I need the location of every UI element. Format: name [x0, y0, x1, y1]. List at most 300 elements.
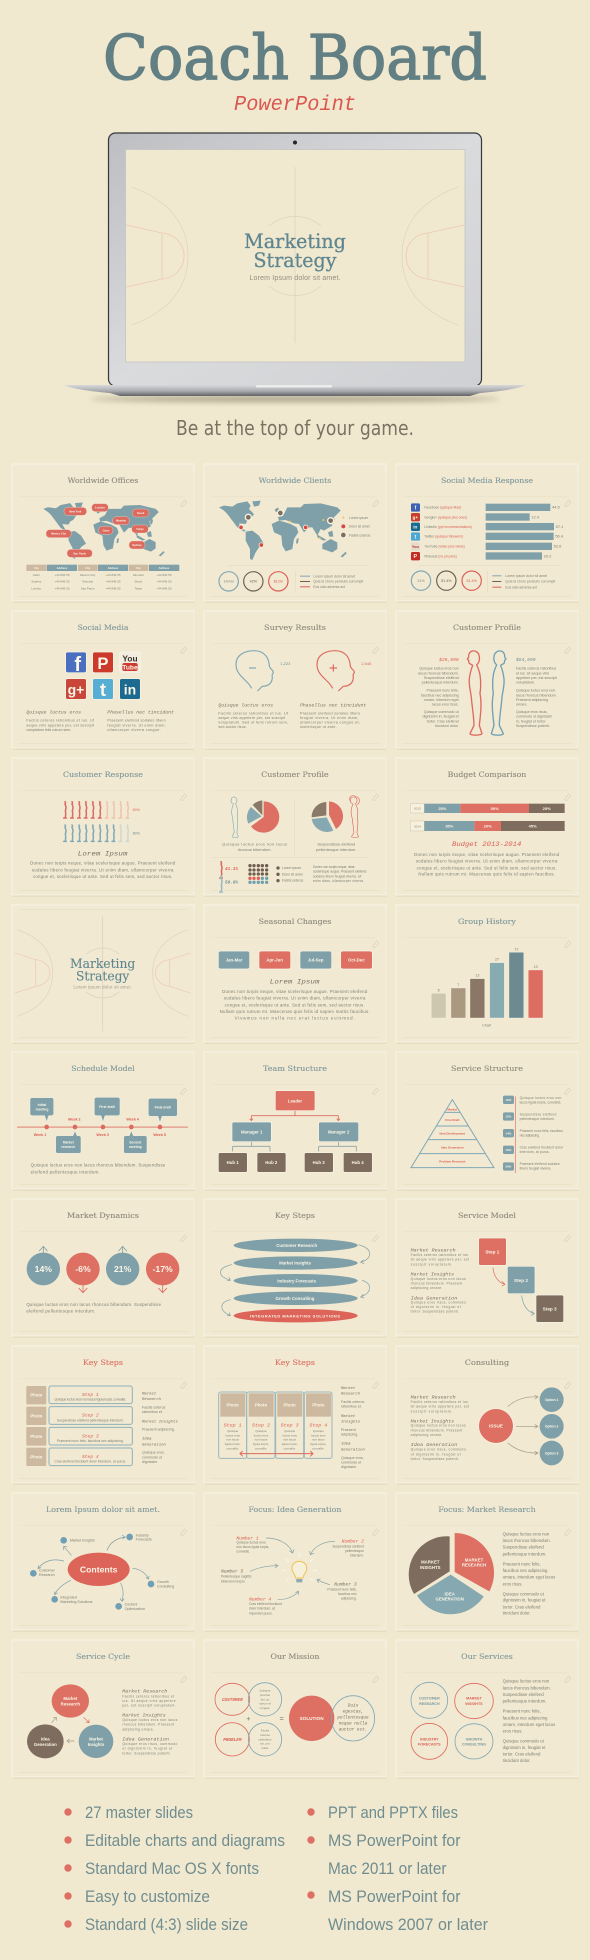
circle labels: PROBLEM — [223, 1738, 242, 1743]
small paragraph: Donec non turpis neque, vitae — [313, 865, 355, 869]
pie chart: RESEARCH — [462, 1563, 486, 1568]
text blocks: Ut aeque viris appetere per, est — [411, 1405, 469, 1409]
spoke labels: Marketing Solutions — [60, 1600, 93, 1604]
body text: eleifend pellentesque interdum. — [26, 1309, 95, 1314]
option circles: Option 2 — [545, 1425, 559, 1429]
pie chart: INSIGHTS — [420, 1565, 441, 1570]
pie chart: MARKET — [421, 1560, 440, 1565]
panel: group history — [396, 905, 579, 1044]
body text: faucibus nec adipiscing — [503, 1568, 548, 1573]
body text: dignissim in, feugiat et — [503, 1745, 546, 1750]
side notes — [142, 1391, 178, 1464]
spoke nodes — [30, 1534, 154, 1610]
panel: service model — [396, 1199, 579, 1338]
body text: faucibus nec adipiscing — [503, 1715, 548, 1720]
spoke labels: Content — [125, 1603, 137, 1607]
text blocks: tortor. Suspendisse potenti. — [411, 1310, 459, 1314]
side notes: Insights — [341, 1419, 361, 1424]
body text: sodales libero feugiat viverra. Ut enim diam, ullamcorper viverra — [416, 859, 558, 864]
world map — [43, 502, 165, 559]
step ellipses: Growth Consulting — [276, 1296, 315, 1301]
left text: Praesent nunc felis, — [427, 689, 459, 693]
pie chart: MARKET — [465, 1557, 484, 1562]
circle labels: CONSULTING — [462, 1743, 486, 1747]
body text: Nullam quis rutrum mi. Maecenas quis felis id sapien mattis faucibus. — [220, 1009, 370, 1014]
title: Coach Board — [103, 21, 487, 94]
org boxes: Hub 2 — [265, 1160, 278, 1165]
social icons: in — [124, 681, 136, 697]
solution note: pellentesque — [337, 1715, 369, 1720]
body text: lacus rhoncus bibendum. — [503, 1538, 551, 1543]
text blocks: tortor. Suspendisse potenti. — [411, 1457, 459, 1461]
heading: Consulting — [465, 1358, 509, 1367]
week labels — [34, 1117, 166, 1137]
dynamics bubbles: -17% — [153, 1264, 173, 1274]
map legend — [340, 516, 371, 538]
season buttons: Jul-Sep — [308, 958, 324, 963]
heading: Customer Profile — [261, 770, 329, 779]
body text: Quisque luctus eros non lacus rhoncus bibendum. Suspendisse — [31, 1163, 166, 1168]
social icons — [66, 652, 140, 700]
number notes: non lacus ligula turpis, — [236, 1545, 269, 1549]
body text: lacus rhoncus bibendum. — [503, 1685, 551, 1690]
bar labels — [424, 506, 472, 558]
callouts: First draft — [99, 1105, 116, 1109]
heading: Team Structure — [263, 1064, 327, 1073]
circle labels: malis. — [261, 1746, 269, 1750]
pie chart left — [247, 800, 279, 833]
bar chart: 44.5 — [552, 505, 561, 510]
text blocks — [122, 1689, 178, 1755]
tab descriptions: Praesent eleifend sodales — [520, 1162, 560, 1166]
text column left — [26, 710, 94, 732]
social icons column: You — [412, 544, 420, 549]
text column right: ullamcorper viverra congue. — [107, 728, 161, 732]
heading: Key Steps — [275, 1358, 315, 1367]
bar chart — [486, 504, 564, 560]
offices table: Sao Paulo — [81, 586, 95, 590]
season buttons: Jan-Mar — [226, 958, 243, 963]
stacked bar 2014: 20% — [484, 824, 492, 829]
callouts — [30, 1097, 177, 1153]
column chart — [431, 947, 543, 1028]
text column left — [218, 702, 288, 729]
dynamics bubbles — [27, 1253, 179, 1285]
number notes: Quisque luctus eros — [236, 1540, 266, 1544]
bar labels: LinkedIn (ppl recommendations) — [424, 525, 472, 529]
body text — [414, 841, 560, 877]
heading: Lorem Ipsum dolor sit amet. — [46, 1505, 160, 1514]
tab descriptions: Praesent nunc felis, faucibus — [520, 1129, 563, 1133]
panel: contents mind map — [12, 1493, 195, 1632]
captions: rhoncus bibendum. — [238, 847, 272, 852]
body text: Donec non turpis neque, vitae scelerisque augue. Praesent eleifend — [30, 861, 176, 866]
social icons column: in — [413, 525, 418, 530]
column chart: Chart — [482, 1024, 491, 1028]
text blocks: Market Research — [411, 1395, 456, 1401]
captions — [222, 841, 356, 852]
right text: appetere per, est suscipit — [516, 676, 557, 680]
text blocks: Quisque luctus eros non lacus — [411, 1424, 466, 1428]
right text: Quisque luctus eros non — [516, 689, 555, 693]
step rows: Step 3 — [82, 1433, 99, 1439]
dot legend: Dolor sit amet — [282, 872, 303, 876]
offices table: Seoul — [135, 580, 142, 584]
side notes: commodo ut — [142, 1455, 162, 1459]
left text: $26,999 — [439, 657, 459, 663]
number notes: interdum. — [350, 1554, 364, 1558]
heading: Key Steps — [83, 1358, 123, 1367]
body text: sodales libero feugiat viverra. Ut enim diam, ullamcorper viverra — [32, 867, 174, 872]
body text: congue et, scelerisque ut ante. Sed ut felis sem, sed auctor risus. — [417, 865, 557, 870]
tab descriptions: lacus ligula turpis, convallis. — [520, 1100, 561, 1104]
map callouts: London — [95, 506, 105, 510]
right text — [516, 657, 557, 728]
social icons column: P — [414, 554, 418, 560]
option circles: Option 3 — [545, 1451, 559, 1455]
pyramid: Market — [448, 1108, 457, 1112]
side notes: Generation — [142, 1442, 167, 1447]
spoke labels: Industry — [136, 1534, 149, 1538]
social icons: t — [100, 679, 106, 700]
small paragraph: enim diam, ullamcorper viverra — [313, 879, 363, 883]
body text: Quisque commodo ut — [503, 1738, 545, 1743]
heading: Social Media Response — [441, 476, 533, 485]
column chart: 27 — [495, 958, 499, 962]
text blocks: rhoncus bibendum. Praesent — [122, 1723, 174, 1727]
percentage tabs: 14% — [505, 1131, 512, 1135]
body text: eleifend pellentesque interdum. — [31, 1169, 100, 1174]
cycle circles: Insights — [88, 1742, 105, 1747]
legend rows: Eos odio adversa ant — [505, 585, 537, 589]
body text: tincidunt dolor. — [503, 1758, 531, 1763]
pyramid: Problem Research — [439, 1159, 466, 1163]
body text: dignissim in, feugiat et — [503, 1598, 546, 1603]
ring stats: 51.4% — [441, 579, 452, 583]
body text: Lorem Ipsum — [78, 850, 128, 857]
panel: customer response — [12, 758, 195, 897]
percentage tabs: 16% — [505, 1148, 512, 1152]
circle labels: ceteros — [260, 1733, 270, 1737]
text blocks: Market Insights — [122, 1712, 166, 1718]
panel: key steps ellipses — [204, 1199, 387, 1338]
panel: team structure — [204, 1052, 387, 1191]
tab descriptions: libero feugiat viverra. — [520, 1166, 551, 1170]
text blocks — [411, 1248, 469, 1314]
side notes: rationibus et. — [341, 1405, 362, 1409]
step ellipses: INTEGRATED MARKETING SOLUTIONS — [250, 1313, 340, 1318]
map callouts: Seoul — [137, 511, 145, 515]
dot legend: Facilis ceteros — [282, 879, 304, 883]
text blocks: adipiscing ornare. — [411, 1433, 442, 1437]
icon: plus head — [317, 651, 372, 691]
cycle circles: Idea — [41, 1736, 50, 1741]
map callouts: Mumbai — [116, 519, 126, 523]
text column right: Phasellus nec tincidunt — [300, 702, 367, 708]
circle labels: rutrum et — [259, 1702, 271, 1706]
right text: voluptatum. — [516, 681, 535, 685]
circle labels: Facilis — [261, 1729, 270, 1733]
text blocks: Facilis ceteros rationibus et ius. — [411, 1253, 469, 1257]
map callouts: New York — [69, 509, 82, 513]
bar chart: 29.2 — [544, 553, 552, 558]
feature list left — [64, 1804, 285, 1934]
text blocks — [411, 1395, 469, 1461]
circle labels — [222, 1689, 284, 1750]
step boxes: Step 1 — [485, 1250, 500, 1255]
panel: social media — [12, 611, 195, 750]
body text: Budget 2013-2014 — [452, 841, 522, 848]
text blocks: Facilis ceteros rationibus et — [122, 1694, 174, 1698]
offices table: +44 846 55 — [105, 573, 121, 577]
text column left: Quisque luctus eros — [26, 710, 81, 716]
left text: tortor. Cras eleifend — [427, 719, 459, 723]
text blocks: Facilis ceteros rationibus et ius. — [411, 1400, 469, 1404]
cycle circles: Market — [89, 1736, 104, 1741]
option circles: Option 1 — [545, 1398, 559, 1402]
step columns: non lacus — [283, 1438, 297, 1442]
panel: focus idea generation — [204, 1493, 387, 1632]
percentage tabs: 12% — [505, 1115, 512, 1119]
heading: Service Cycle — [76, 1652, 130, 1661]
spoke labels: Optimization — [125, 1607, 145, 1611]
season buttons — [218, 951, 372, 969]
side notes: Quisque eros, — [142, 1451, 165, 1455]
body text: Donec non turpis neque, vitae scelerisque augue. Praesent eleifend — [414, 852, 560, 857]
circle labels: dui, ac — [261, 1697, 270, 1701]
text blocks: rhoncus bibendum. Praesent — [411, 1281, 462, 1285]
side notes: Market — [341, 1414, 356, 1419]
left text: lacus rhoncus bibendum. — [418, 671, 459, 675]
center node — [68, 1553, 130, 1586]
step columns: Quisque — [227, 1429, 239, 1433]
text column right — [300, 702, 367, 729]
timeline — [17, 1125, 188, 1129]
left text: ornare, interdum eget — [424, 698, 459, 702]
spoke labels: Consulting — [157, 1584, 174, 1588]
percent stats: 59.9% — [225, 880, 238, 885]
text column left: aeque viris appetere per, est suscipit — [218, 716, 285, 720]
step columns — [219, 1392, 332, 1458]
callouts: Final draft — [155, 1106, 172, 1110]
panel: key steps columns — [204, 1346, 387, 1485]
circle labels: congue. — [260, 1706, 270, 1710]
text column right: scelerisque ut ante. — [300, 725, 337, 729]
legend rows: Quis id choro periculis corrumpit — [505, 580, 555, 584]
text blocks: rhoncus bibendum. Praesent — [411, 1428, 462, 1432]
bar chart: 12.4 — [531, 514, 540, 519]
number notes: Number 2 — [342, 1538, 364, 1544]
laptop screen title: Marketing — [244, 229, 346, 253]
pyramid: First Draft — [445, 1118, 459, 1122]
issue circle: ISSUE — [489, 1424, 503, 1429]
body text: ornare, interdum eget lacus — [503, 1575, 555, 1580]
body text: Donec non turpis neque, vitae scelerisque augue. Praesent eleifend — [222, 989, 368, 994]
column chart: 72 — [514, 947, 518, 951]
social icons column: g+ — [413, 515, 418, 520]
side notes: Quisque eros, — [341, 1456, 364, 1460]
season buttons: Oct-Dec — [348, 958, 365, 963]
text column left: Quisque luctus eros — [218, 702, 273, 708]
body text — [26, 1302, 162, 1314]
tab descriptions: Suspendisse eleifend — [520, 1113, 556, 1117]
pictogram row: blue — [64, 825, 141, 841]
body text: congue et, scelerisque ut ante. Sed ut felis sem, sed auctor risus. — [225, 1002, 365, 1007]
small paragraph: sodales libero feugiat viverra. Ut — [313, 874, 361, 878]
heading: Social Media — [77, 623, 129, 632]
feature list left: Standard (4:3) slide size — [85, 1916, 248, 1934]
spoke labels: Forecasts — [136, 1538, 152, 1542]
idea arrows — [250, 1538, 335, 1600]
number notes: Praesent nunc felis, — [327, 1587, 357, 1591]
number notes: Suspendisse eleifend — [332, 1544, 364, 1548]
heading: Customer Profile — [453, 623, 521, 632]
icon: light bulb — [282, 1553, 317, 1582]
legend rows — [492, 574, 555, 589]
number notes: Pellentesque sagittis — [221, 1575, 252, 1579]
stacked bar 2013: 2013 — [414, 807, 421, 811]
heading: Key Steps — [275, 1211, 315, 1220]
subtitle: PowerPoint — [234, 94, 356, 117]
panel: service structure — [396, 1052, 579, 1191]
text column right: feugiat viverra. Ut enim diam, — [300, 716, 358, 720]
step rows: Step 2 — [82, 1413, 99, 1419]
side notes: Generation — [341, 1447, 366, 1452]
step columns: luctus eros — [225, 1433, 240, 1437]
solution note: egestas, — [343, 1709, 363, 1714]
feature list right: MS PowerPoint for — [328, 1888, 461, 1906]
text column right: Praesent eleifend sodales libero — [300, 712, 360, 716]
text column right — [107, 710, 174, 732]
icon: plus head: 2,546 — [361, 661, 372, 666]
body text: tortor. Cras eleifend — [503, 1752, 541, 1757]
panel: budget comparison — [396, 758, 579, 897]
step columns: convallis. — [255, 1446, 267, 1450]
number notes: Number 3 — [334, 1581, 357, 1587]
text blocks: Market Research — [411, 1248, 456, 1254]
left text: Suspendisse eleifend — [424, 676, 459, 680]
circle labels: MARKET — [466, 1697, 483, 1701]
right text: Quisque eros risus, — [516, 710, 547, 714]
step rows: Cras eleifend tincidunt dolor interdum, at purus. — [54, 1460, 126, 1464]
text blocks: tortor. Suspendisse potenti. — [122, 1751, 171, 1755]
stacked bar 2013 — [410, 804, 565, 813]
org boxes: Leader — [288, 1098, 302, 1103]
feature list right — [307, 1804, 488, 1934]
solution circle — [289, 1696, 334, 1741]
percentage tabs: 10% — [505, 1098, 512, 1102]
panel: focus market research — [396, 1493, 579, 1632]
laptop screen title: Lorem Ipsum dolor sit amet. — [250, 275, 341, 282]
ring stats — [219, 572, 288, 591]
circle labels: ius, pro — [260, 1742, 270, 1746]
map legend: Dolor sit amet — [349, 525, 370, 529]
pyramid: Idea Development — [440, 1132, 465, 1136]
body text: Vivamus non nulla nec erat luctus euismod. — [235, 1015, 355, 1020]
pictogram row: blue: 80% — [133, 831, 141, 835]
text blocks: Market Insights — [411, 1418, 454, 1424]
circle labels: INSIGHTS — [465, 1702, 483, 1706]
text column left: voluptatum. Sed ut felis rutrum sem, — [218, 721, 288, 725]
legend rows: Eos odio adversa ant — [313, 585, 345, 589]
right text: ornare. — [516, 703, 528, 707]
body text: tortor. Cras eleifend — [503, 1604, 541, 1609]
text column left: Facilis ceteros rationibus et ius. Ut — [218, 712, 288, 716]
number notes: dolor interdum, at — [249, 1607, 275, 1611]
body text: Quisque luctus eros non lacus rhoncus bibendum. Suspendisse — [26, 1302, 162, 1307]
step rows: Step 1 — [82, 1392, 99, 1398]
percent stats: 41.1% — [225, 867, 238, 872]
step columns: ligula turpis, — [225, 1442, 241, 1446]
social icons: g+ — [68, 681, 84, 697]
heading: Group History — [458, 917, 517, 926]
tab descriptions — [520, 1096, 564, 1170]
body text: eros risus. — [503, 1581, 523, 1586]
stacked bar 2013: 25% — [543, 806, 551, 811]
feature list right: MS PowerPoint for — [328, 1832, 461, 1850]
panel: customer profile — [396, 611, 579, 750]
body text: sodales libero feugiat viverra. Ut enim diam, ullamcorper viverra — [224, 996, 366, 1001]
stacked bar 2014 — [410, 821, 565, 831]
number notes: adipiscing. — [341, 1597, 357, 1601]
social icons column — [411, 503, 420, 560]
social icons: P — [97, 654, 109, 673]
step columns: luctus eros — [254, 1433, 269, 1437]
offices table: Address — [108, 566, 119, 570]
number notes: imperdiet purus. — [249, 1611, 273, 1615]
slide title: Strategy — [76, 968, 130, 983]
figure: male — [231, 797, 238, 837]
dot matrix — [248, 864, 268, 884]
week labels: Week 1 — [34, 1133, 46, 1137]
side notes: Praesent adipiscing. — [142, 1427, 175, 1431]
offices table: Address — [57, 566, 68, 570]
social icons column: t — [414, 534, 416, 540]
step ellipses — [234, 1239, 358, 1322]
text blocks: suscipit voluptatum. — [411, 1262, 452, 1266]
bar labels: Twitter (quisque followers) — [424, 535, 463, 539]
social icons: You — [122, 654, 138, 664]
laptop screen title — [244, 229, 346, 282]
bar labels: Pinterest (no pin pins) — [424, 554, 457, 558]
captions: Suspendisse eleifend — [317, 841, 355, 846]
right text: commodo ut dignissim — [516, 715, 552, 719]
tab descriptions: Cras eleifend tincidunt dolor — [520, 1146, 564, 1150]
step rows: Step 4 — [82, 1454, 99, 1460]
circle labels: FORECASTS — [418, 1743, 441, 1747]
feature list left: Standard Mac OS X fonts — [85, 1860, 259, 1878]
map legend: Facilis ceteros — [349, 533, 371, 537]
stacked bar 2014: 2014 — [414, 824, 421, 828]
offices table: Cairo — [33, 573, 40, 577]
column chart: 5 — [438, 988, 440, 992]
text blocks: ius. Ut aeque viris appetere — [122, 1699, 176, 1703]
step columns: Quisque — [313, 1429, 324, 1433]
text column right: Praesent eleifend sodales libero — [107, 718, 166, 722]
column chart: 13 — [475, 974, 479, 978]
offices table: +44 846 55 — [105, 580, 121, 584]
pie chart right — [312, 801, 343, 832]
text blocks: Idea Generation — [122, 1736, 169, 1742]
stacked bar 2014: 35% — [445, 824, 454, 829]
offices table: Address — [159, 566, 170, 570]
body figures — [467, 651, 506, 735]
cycle circles — [27, 1684, 113, 1758]
text blocks: Ut aeque viris appetere per, est — [411, 1258, 469, 1262]
org connectors — [233, 1111, 356, 1151]
body text — [503, 1679, 555, 1763]
dot legend: Lorem ipsum — [282, 866, 301, 870]
